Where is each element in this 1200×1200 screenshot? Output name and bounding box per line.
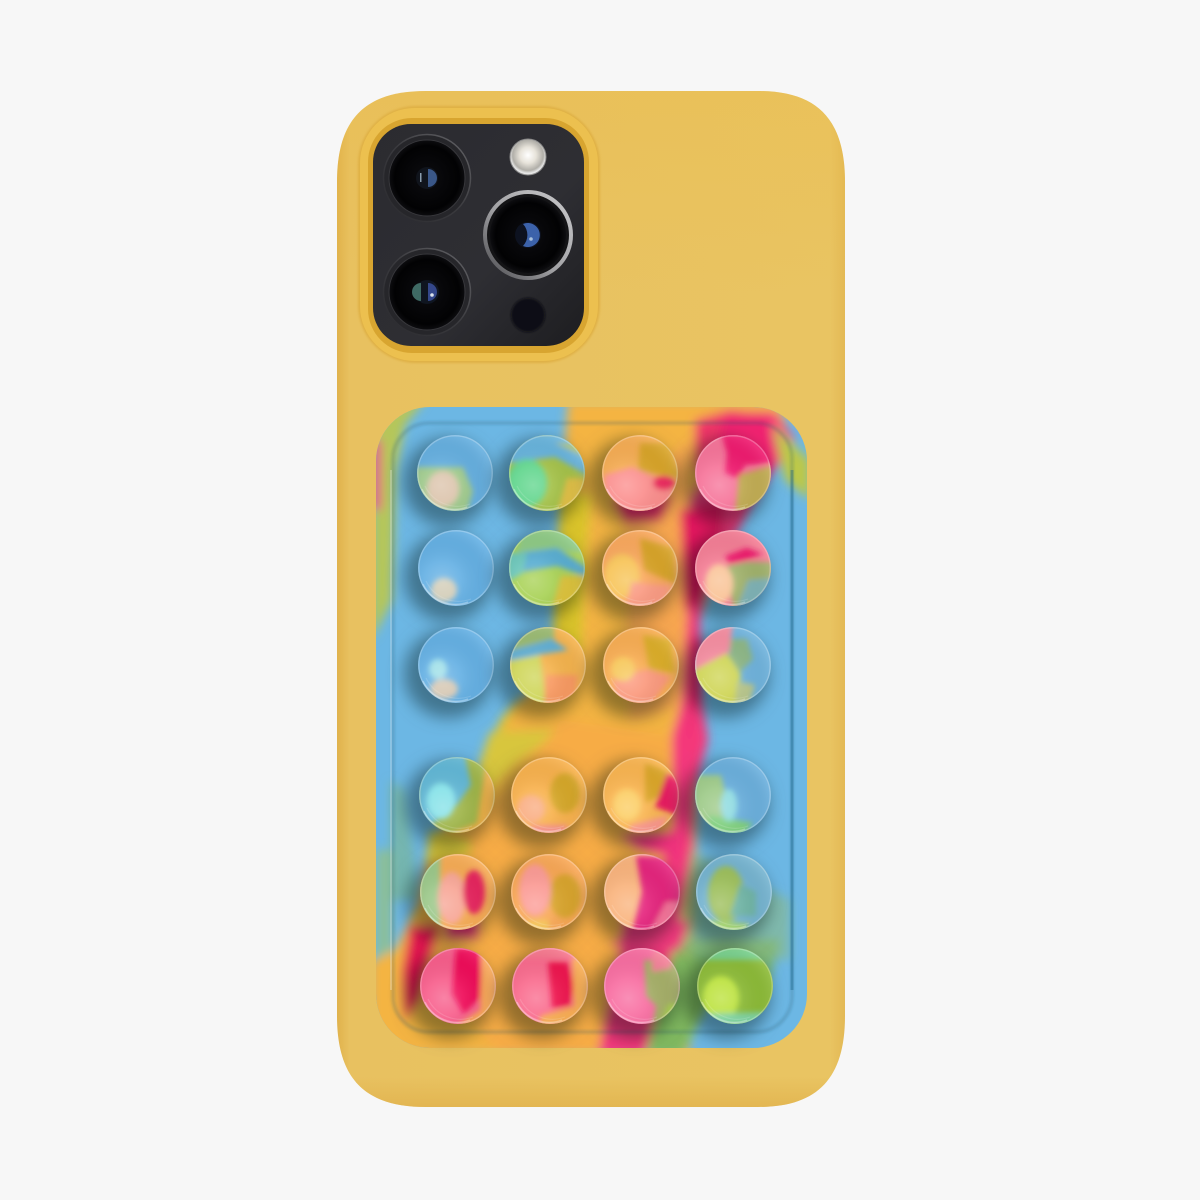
cup row 3 column 3	[589, 625, 681, 718]
phone case body	[337, 91, 845, 1107]
cup row 6 column 4	[683, 946, 775, 1039]
cup row 2 column 4	[681, 528, 773, 621]
suction pad	[370, 400, 815, 1055]
cup row 5 column 2	[497, 852, 589, 945]
cup row 4 column 4	[681, 755, 773, 848]
cup row 4 column 3	[589, 755, 681, 848]
cup row 2 column 1	[404, 528, 496, 621]
camera glass plate	[373, 124, 584, 346]
product illustration: phone case with suction pad	[337, 91, 845, 1107]
cup row 1 column 1	[403, 433, 495, 526]
flash	[510, 139, 546, 175]
pad inner raised lip	[391, 423, 792, 1032]
cup row 1 column 3	[588, 433, 680, 526]
cup row 6 column 3	[590, 946, 682, 1039]
cup row 4 column 2	[497, 755, 589, 848]
suction cup grid	[403, 433, 775, 1039]
cup row 3 column 2	[496, 625, 588, 718]
camera module	[358, 106, 600, 363]
cup row 2 column 3	[588, 528, 680, 621]
lens: top left	[384, 134, 470, 222]
cup row 5 column 4	[682, 852, 774, 945]
camera bump surround	[358, 106, 600, 363]
cup row 5 column 1	[406, 852, 498, 945]
cup row 4 column 1	[405, 755, 497, 848]
lens: bottom left	[384, 248, 470, 336]
cup row 1 column 2	[495, 433, 587, 526]
cup row 2 column 2	[495, 528, 587, 621]
pad colour swirl	[370, 400, 815, 1055]
cup row 6 column 2	[498, 946, 590, 1039]
cup row 1 column 4	[681, 433, 773, 526]
lens: right with silver ring	[485, 192, 571, 278]
cup row 3 column 1	[404, 625, 496, 718]
cup row 6 column 1	[406, 946, 498, 1039]
cup row 5 column 3	[590, 852, 682, 945]
cup row 3 column 4	[681, 625, 773, 718]
microphone / sensor	[511, 298, 545, 332]
